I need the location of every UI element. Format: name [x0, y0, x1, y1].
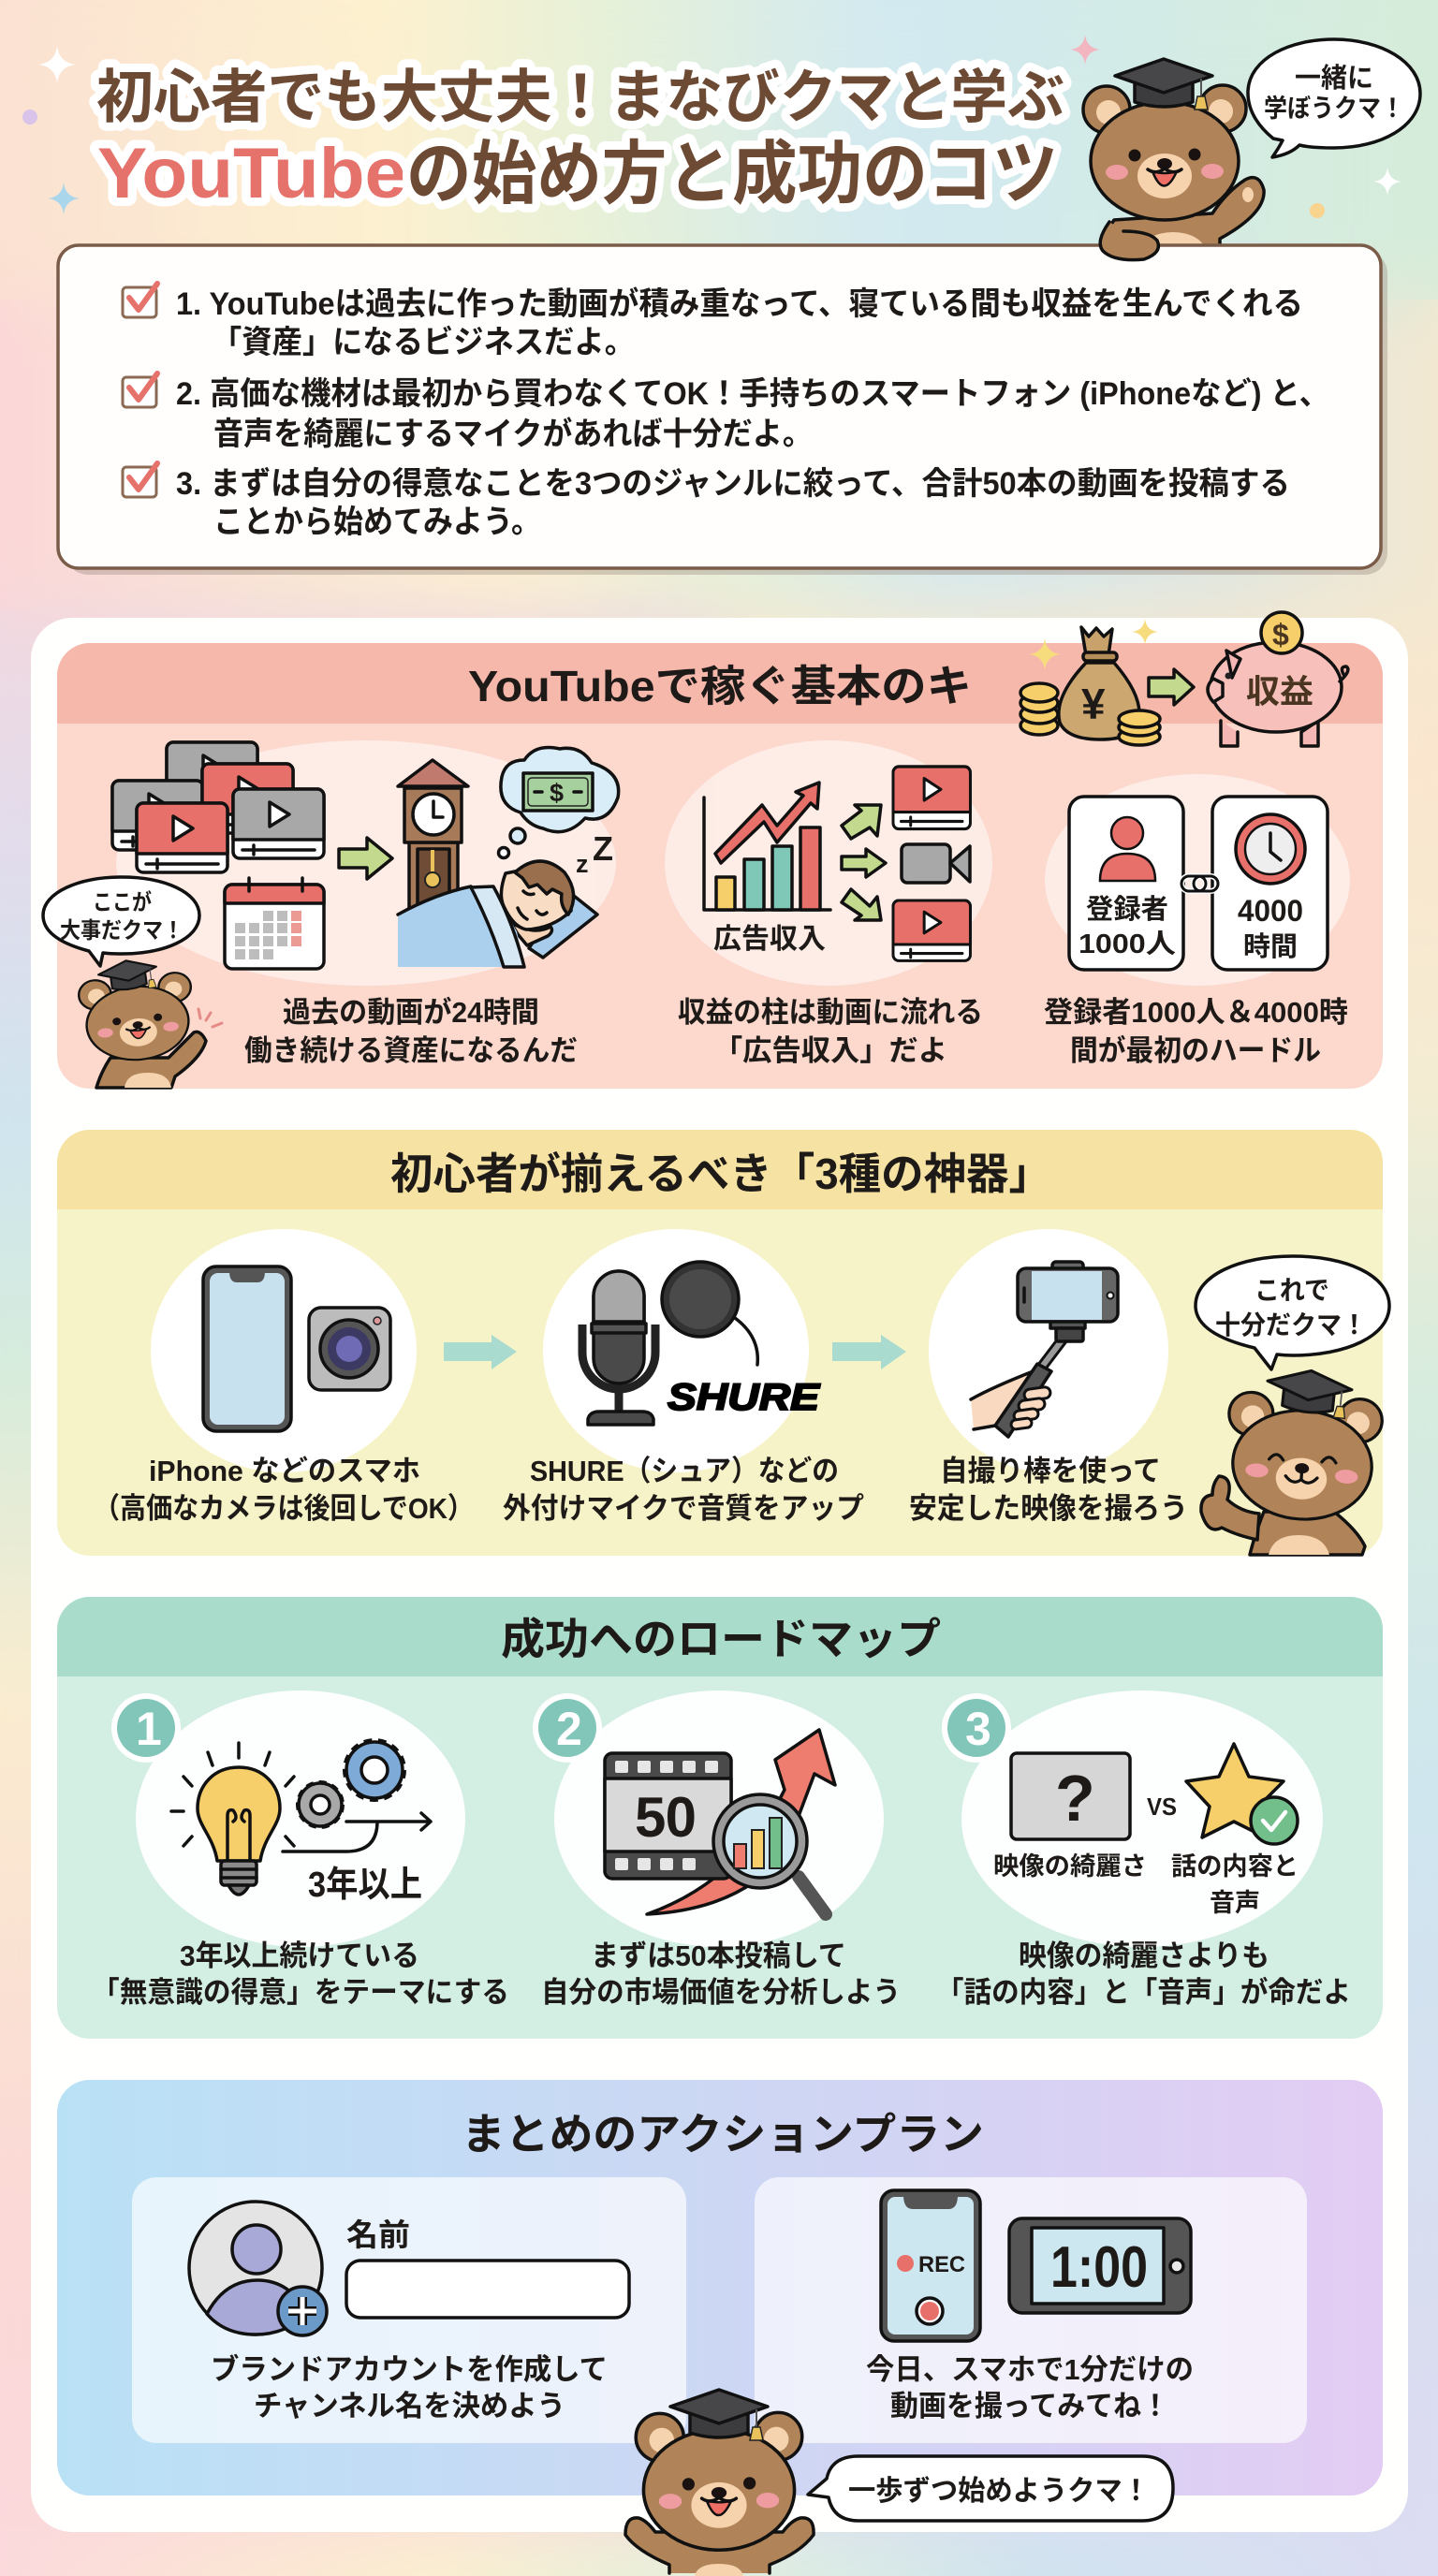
icon: person sleeping under blanket: [398, 861, 597, 967]
title: の始め方と成功のコツ: [406, 135, 1058, 212]
label: ad revenue: 広告収入: [713, 924, 826, 955]
caption: assets: [244, 996, 578, 1067]
icon: chain link: [1181, 876, 1218, 891]
caption: assets: 過去の動画が24時間: [283, 996, 539, 1029]
caption: selfie stick: 安定した映像を撮ろう: [909, 1492, 1188, 1525]
speech bubble: top: 一緒に: [1295, 63, 1373, 94]
panel: roadmap to success: [57, 1597, 1383, 2039]
speech bubble: important: 大事だクマ！: [60, 918, 183, 944]
caption: selfie stick: 自撮り棒を使って: [940, 1455, 1161, 1487]
arrow: money to piggy bank: [1149, 669, 1194, 705]
point 3 text: [176, 466, 1290, 540]
labels: picture vs content: 映像の綺麗さ: [993, 1852, 1147, 1881]
input field: [346, 2261, 629, 2318]
icon: video camera: [902, 844, 970, 883]
point 1 text: 「資産」になるビジネスだよ。: [212, 325, 635, 360]
caption: record: 今日、スマホで1分だけの: [866, 2353, 1194, 2386]
icon: horizontal phone timer: 1:00: [1050, 2235, 1148, 2300]
card: create account: [132, 2177, 686, 2443]
badge: step 2: 2: [556, 1703, 582, 1755]
title: YouTube: [97, 134, 406, 213]
speech bubble: important: ここが: [93, 889, 152, 915]
mascot body behind intro box: [1105, 178, 1264, 270]
label: vs: VS: [1147, 1793, 1177, 1821]
icon: film strip with 50: 50: [635, 1786, 697, 1849]
icon: stacked video cards: [112, 742, 324, 872]
mascot: thumbs up bear: [1201, 1367, 1384, 1555]
caption: create account: チャンネル名を決めよう: [254, 2390, 565, 2422]
main white card: [31, 618, 1408, 2532]
caption: selfie stick: [909, 1455, 1188, 1525]
icon: grandfather clock: [398, 760, 468, 910]
white circle backdrops: [151, 1229, 1168, 1472]
title: 初心者でも大丈夫！まなびクマと学ぶ: [96, 66, 1064, 130]
speech bubble: top: [1248, 39, 1420, 157]
heading: 成功へのロードマップ: [501, 1615, 941, 1663]
label: three years: 3年以上: [308, 1866, 422, 1905]
icon: horizontal phone timer: [1009, 2218, 1191, 2313]
icon: camera: [309, 1308, 390, 1390]
caption: hurdle: 登録者1000人＆4000時: [1044, 996, 1348, 1029]
icon: microphone: [582, 1271, 655, 1425]
panel: YouTube earning basics: [43, 612, 1383, 1089]
mascot: bottom bear cheering: [625, 2390, 814, 2576]
point 3 text: 3. まずは自分の得意なことを3つのジャンルに絞って、合計50本の動画を投稿する: [176, 466, 1290, 502]
icon: film strip with 50: [605, 1753, 731, 1879]
decorative sparkles: [22, 35, 1401, 218]
speech bubble: one step at a time: [808, 2456, 1173, 2521]
header band: [57, 1130, 1383, 1209]
point 1 text: 1. YouTubeは過去に作った動画が積み重なって、寝ている間も収益を生んでくれる: [176, 285, 1303, 322]
intro box with three key points: [58, 245, 1387, 575]
icon: piggy bank with coin: 収益: [1246, 674, 1313, 710]
title: [96, 66, 1064, 213]
caption: create account: [211, 2353, 608, 2422]
icon: thought cloud with banknote: [498, 747, 619, 857]
header band: [57, 643, 1383, 724]
heading: 初心者が揃えるべき「3種の神器」: [390, 1149, 1051, 1198]
white circle backdrops: [136, 1690, 1323, 1947]
labels: picture vs content: [993, 1852, 1299, 1917]
arrow: cards to clock: [339, 838, 392, 879]
badge: step 2: [533, 1693, 602, 1763]
icon: path arrow: [283, 1813, 431, 1852]
caption: phone: iPhone などのスマホ: [149, 1455, 420, 1487]
icon: calendar: [225, 878, 324, 969]
arrow: phone to mic: [444, 1335, 517, 1369]
heading: YouTubeで稼ぐ基本のキ: [468, 662, 972, 710]
caption: assets: 働き続ける資産になるんだ: [244, 1034, 578, 1067]
caption: step 1: 3年以上続けている: [180, 1939, 419, 1972]
icon: selfie stick with phone: [971, 1262, 1118, 1437]
point 3 text: ことから始めてみよう。: [213, 505, 541, 540]
caption: create account: ブランドアカウントを作成して: [211, 2353, 608, 2386]
icon: rising red arrow: [647, 1730, 835, 1914]
caption: record: 動画を撮ってみてね！: [890, 2390, 1169, 2422]
caption: step 2: まずは50本投稿して: [591, 1939, 846, 1972]
icon: question box: [1011, 1753, 1130, 1839]
speech bubble: important: [43, 877, 199, 966]
mascot: top bear waving: [1083, 59, 1246, 260]
icon: vertical phone recording: [881, 2190, 980, 2341]
card: 4000 hours: 4000: [1238, 894, 1303, 928]
white blob backdrops: [116, 740, 1350, 986]
icon: light bulb: [171, 1743, 294, 1895]
caption: microphone: [503, 1455, 864, 1525]
icon: sleep letters zZ: z: [576, 850, 588, 878]
icon: bar chart with rising arrow: [704, 783, 830, 910]
caption: ad revenue: 収益の柱は動画に流れる: [678, 996, 983, 1029]
header band: [57, 1597, 1383, 1676]
icon: gears: [299, 1742, 403, 1826]
card: 1000 subscribers: [1069, 797, 1183, 970]
caption: step 2: 自分の市場価値を分析しよう: [541, 1976, 901, 2009]
heading: まとめのアクションプラン: [462, 2110, 984, 2159]
caption: record: [866, 2353, 1194, 2422]
badge: step 3: [942, 1693, 1011, 1763]
icon: star with check: [1186, 1744, 1298, 1844]
icon: piggy bank with coin: $: [1272, 618, 1289, 651]
caption: microphone: SHURE（シュア）などの: [530, 1455, 839, 1487]
icon: piggy bank with coin: [1208, 612, 1348, 746]
caption: step 1: 「無意識の得意」をテーマにする: [92, 1976, 509, 2009]
arrow: mic to selfie stick: [832, 1335, 906, 1369]
caption: hurdle: [1044, 996, 1348, 1067]
arrows: revenue to videos: [842, 805, 886, 920]
point 2 text: 2. 高価な機材は最初から買わなくてOK！手持ちのスマートフォン (iPhoneなど) と、: [176, 376, 1329, 412]
panel: action plan summary: [57, 2080, 1383, 2496]
icon: pop filter: [662, 1262, 757, 1365]
caption: step 1: [92, 1939, 509, 2009]
icon: magnifying glass with chart: [713, 1794, 826, 1914]
icon: sleep letters zZ: Z: [593, 829, 613, 868]
caption: step 3: 映像の綺麗さよりも: [1019, 1939, 1269, 1972]
icon: check 1: [123, 284, 157, 317]
badge: step 1: [111, 1693, 181, 1763]
icon: video bottom: [893, 900, 970, 960]
caption: step 3: [936, 1939, 1351, 2009]
speech bubble: enough: [1196, 1256, 1389, 1369]
caption: ad revenue: 「広告収入」だよ: [713, 1034, 947, 1067]
speech bubble: one step at a time: 一歩ずつ始めようクマ！: [848, 2476, 1150, 2507]
icon: video top: [893, 767, 970, 829]
point 1 text: [176, 285, 1303, 360]
caption: step 3: 「話の内容」と「音声」が命だよ: [936, 1976, 1351, 2009]
labels: picture vs content: 話の内容と: [1171, 1852, 1299, 1881]
icon: money bag and coins: [1020, 619, 1160, 745]
point 2 text: 音声を綺麗にするマイクがあれば十分だよ。: [213, 416, 813, 452]
caption: hurdle: 間が最初のハードル: [1070, 1034, 1321, 1067]
caption: phone: [94, 1455, 474, 1525]
icon: smartphone: [203, 1266, 291, 1431]
icon: user avatar with plus: [189, 2202, 327, 2335]
caption: ad revenue: [678, 996, 983, 1067]
speech bubble: top: 学ぼうクマ！: [1264, 95, 1404, 123]
card: 4000 hours: [1212, 797, 1328, 970]
logo: SHURE: SHURE: [668, 1377, 821, 1418]
card: 4000 hours: 時間: [1243, 931, 1298, 962]
card: 1000 subscribers: 登録者: [1086, 894, 1168, 925]
badge: step 3: 3: [965, 1703, 991, 1755]
icon: sleep letters zZ: [576, 829, 613, 878]
icon: money bag and coins: ¥: [1081, 680, 1106, 728]
labels: picture vs content: 音声: [1210, 1889, 1260, 1917]
icon: question box: ?: [1055, 1762, 1095, 1835]
label: name: 名前: [346, 2217, 410, 2252]
caption: microphone: 外付けマイクで音質をアップ: [503, 1492, 864, 1525]
card: record one minute: [755, 2177, 1307, 2443]
icon: thought cloud with banknote: $: [550, 779, 564, 807]
badge: step 1: 1: [136, 1703, 162, 1755]
speech bubble: enough: 十分だクマ！: [1215, 1310, 1367, 1339]
speech bubble: enough: これで: [1255, 1276, 1329, 1305]
card: 1000 subscribers: 1000人: [1078, 929, 1176, 959]
panel: three essential tools: [57, 1130, 1389, 1556]
caption: phone: （高価なカメラは後回しでOK）: [94, 1492, 474, 1525]
icon: check 2: [123, 373, 157, 407]
icon: vertical phone recording: REC: [918, 2252, 965, 2277]
caption: step 2: [541, 1939, 901, 2009]
icon: check 3: [123, 463, 157, 497]
point 2 text: [176, 376, 1329, 452]
mascot: small bear: [78, 957, 222, 1088]
